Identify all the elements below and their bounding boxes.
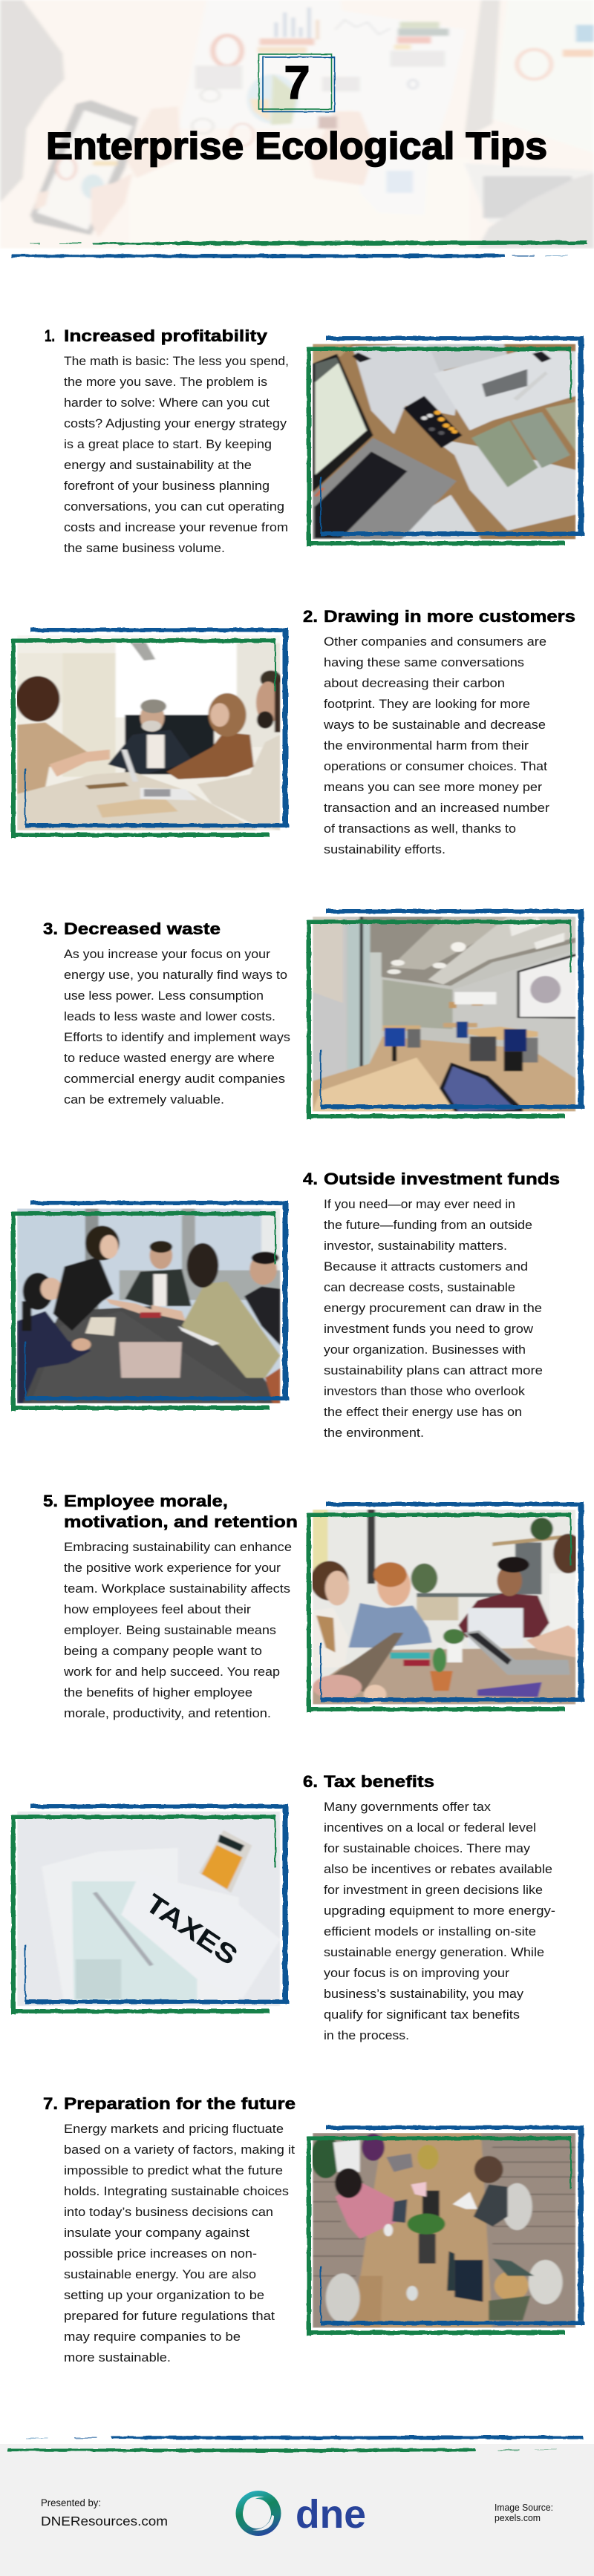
section 2: drawing in more customers [11, 607, 575, 856]
heading 2: 2. [303, 607, 318, 626]
body text 6: in the process. [324, 2028, 409, 2042]
heading 5: motivation, and retention [64, 1513, 298, 1531]
section 7: preparation for the future [43, 2094, 584, 2364]
body text 3: to reduce wasted energy are where [64, 1051, 275, 1065]
heading 1: 1. [45, 327, 55, 345]
body text 3: leads to less waste and lower costs. [64, 1009, 275, 1023]
hero banner: faded photo of charts, phone and laptop [0, 0, 594, 249]
body text 3 [64, 947, 290, 1107]
body text 4: the future—funding from an outside [324, 1218, 532, 1232]
section 5: employee morale [43, 1492, 584, 1720]
body text 7: prepared for future regulations that [64, 2309, 275, 2323]
body text 6: upgrading equipment to more energy- [324, 1904, 555, 1918]
body text 5: being a company people want to [64, 1644, 262, 1658]
body text 2: of transactions as well, thanks to [324, 822, 516, 836]
number badge: 7 [258, 54, 334, 111]
body text 1: energy and sustainability at the [64, 458, 252, 472]
body text 6: Many governments offer tax [324, 1800, 492, 1814]
body text 7: setting up your organization to be [64, 2288, 264, 2302]
body text 7: based on a variety of factors, making it [64, 2143, 295, 2157]
body text 2: the environmental harm from their [324, 738, 529, 753]
body text 1: costs and increase your revenue from [64, 520, 288, 534]
body text 6: efficient models or installing on-site [324, 1924, 536, 1938]
body text 3: Efforts to identify and implement ways [64, 1030, 290, 1044]
TAXES lettering on paper: TAXES [140, 1887, 244, 1971]
presenter credit: Presented by: [41, 2497, 101, 2508]
section 3: decreased waste [43, 909, 584, 1119]
body text 6: your focus is on improving your [324, 1966, 509, 1980]
heading 3: Decreased waste [64, 920, 221, 938]
body text 1: harder to solve: Where can you cut [64, 396, 270, 410]
body text 2 [323, 635, 549, 856]
body text 1: the same business volume. [64, 541, 225, 555]
body text 5: morale, productivity, and retention. [64, 1706, 271, 1720]
body text 4: investment funds you need to grow [324, 1322, 534, 1336]
photo: team around laptops at a wooden table [310, 1510, 584, 1705]
body text 4: energy procurement can draw in the [324, 1301, 542, 1315]
footer band [0, 2444, 594, 2576]
body text 4: If you need—or may ever need in [324, 1197, 515, 1211]
body text 3: As you increase your focus on your [64, 947, 270, 961]
body text 5: team. Workplace sustainability affects [64, 1582, 290, 1596]
body text 7: possible price increases on non- [64, 2246, 257, 2261]
body text 4: the environment. [324, 1426, 424, 1440]
body text 2: Other companies and consumers are [324, 635, 546, 649]
badge number: 7 [284, 57, 310, 109]
body text 1: The math is basic: The less you spend, [64, 354, 289, 368]
section 6: tax benefits [11, 1772, 555, 2042]
brush frame 3 [307, 909, 584, 1119]
hero top line: green brush stroke [30, 240, 587, 245]
body text 5: employer. Being sustainable means [64, 1623, 276, 1637]
brush frame 7 [307, 2126, 584, 2336]
section 1: increased profitability [45, 327, 584, 555]
title: Enterprise Ecological Tips [46, 125, 547, 167]
body text 6 [324, 1800, 555, 2042]
heading 5: 5. [43, 1492, 58, 1510]
section 4: outside investment funds [11, 1170, 560, 1440]
photo: office room with blue chairs [313, 917, 576, 1112]
body text 2: transaction and an increased number [324, 801, 549, 815]
body text 7 [64, 2122, 295, 2364]
heading 6: 6. [303, 1772, 318, 1791]
body text 2: ways to be sustainable and decrease [323, 718, 546, 732]
body text 2: footprint. They are looking for more [324, 697, 530, 711]
body text 1: is a great place to start. By keeping [64, 437, 272, 451]
body text 7: insulate your company against [64, 2226, 249, 2240]
body text 2: sustainability efforts. [324, 842, 446, 856]
photo: laptop, calculator, cash and papers on desk [313, 344, 576, 540]
logo: dne [236, 2491, 366, 2537]
photo shapes [17, 1812, 281, 2006]
body text 4: can decrease costs, sustainable [324, 1280, 515, 1294]
body text 7: Energy markets and pricing fluctuate [64, 2122, 284, 2136]
body text 7: impossible to predict what the future [64, 2163, 283, 2177]
brush frame 1 [307, 336, 584, 546]
body text 1: forefront of your business planning [64, 479, 270, 493]
body text 1: costs? Adjusting your energy strategy [64, 416, 287, 430]
body text 7: more sustainable. [64, 2350, 171, 2364]
heading 4: Outside investment funds [324, 1170, 560, 1188]
presenter credit [41, 2497, 168, 2529]
body text 1 [64, 354, 289, 555]
heading 5: Employee morale, [64, 1492, 228, 1510]
brush frame 5 [307, 1502, 584, 1712]
heading 4: 4. [303, 1170, 318, 1188]
body text 1: conversations, you can cut operating [64, 499, 284, 514]
photo: handshake at a meeting table [16, 635, 281, 830]
body text 7: into today’s business decisions can [64, 2205, 273, 2219]
logo wordmark: dne [296, 2492, 366, 2537]
body text 4: investor, sustainability matters. [324, 1239, 507, 1253]
photo: tax forms, pen and calculator [17, 1812, 281, 2006]
body text 5: the benefits of higher employee [64, 1685, 252, 1700]
footer top line: blue brush stroke [26, 2436, 584, 2440]
photo: five colleagues around a dark table [17, 1208, 281, 1403]
body text 3: use less power. Less consumption [64, 989, 264, 1003]
heading 7: 7. [43, 2094, 58, 2113]
body text 6: incentives on a local or federal level [324, 1820, 536, 1835]
body text 6: also be incentives or rebates available [324, 1862, 552, 1876]
brush frame 4 [11, 1201, 289, 1411]
presenter credit: DNEResources.com [41, 2514, 168, 2529]
heading 2: Drawing in more customers [324, 607, 575, 626]
heading 7: Preparation for the future [64, 2094, 296, 2113]
body text 6: qualify for significant tax benefits [324, 2008, 520, 2022]
hero bottom line: blue brush stroke [11, 254, 568, 258]
heading 6: Tax benefits [324, 1772, 434, 1791]
body text 7: may require companies to be [64, 2330, 241, 2344]
body text 5: how employees feel about their [64, 1602, 251, 1616]
body text 7: sustainable energy. You are also [64, 2267, 256, 2281]
body text 1: the more you save. The problem is [64, 375, 267, 389]
logo ring [236, 2491, 281, 2536]
brush frame 2 [11, 628, 289, 838]
badge frame [258, 54, 334, 111]
body text 6: for sustainable choices. There may [324, 1841, 531, 1855]
body text 2: having these same conversations [324, 655, 524, 669]
body text 4 [324, 1197, 543, 1440]
body text 3: can be extremely valuable. [64, 1092, 224, 1107]
body text 2: about decreasing their carbon [324, 676, 505, 690]
body text 4: investors than those who overlook [324, 1384, 526, 1398]
body text 4: your organization. Businesses with [324, 1343, 526, 1357]
body text 5: Embracing sustainability can enhance [64, 1540, 292, 1554]
image source credit: pexels.com [495, 2513, 541, 2523]
heading 5 [43, 1492, 298, 1531]
body text 6: sustainable energy generation. While [324, 1945, 544, 1959]
body text 6: business’s sustainability, you may [324, 1987, 524, 2001]
body text 4: Because it attracts customers and [324, 1259, 528, 1274]
body text 5: work for and help succeed. You reap [63, 1665, 280, 1679]
image source credit: Image Source: [495, 2503, 553, 2513]
body text 4: the effect their energy use has on [324, 1405, 522, 1419]
body text 5: the positive work experience for your [64, 1561, 281, 1575]
body text 3: commercial energy audit companies [64, 1072, 285, 1086]
heading 1: Increased profitability [64, 327, 268, 345]
body text 4: sustainability plans can attract more [324, 1363, 543, 1377]
brush frame 6 [11, 1804, 289, 2014]
heading 3: 3. [43, 920, 58, 938]
body text 7: holds. Integrating sustainable choices [64, 2184, 289, 2198]
footer bottom line: green brush stroke [7, 2448, 557, 2452]
photo: overhead view of shared wooden desk [310, 2133, 576, 2328]
body text 2: operations or consumer choices. That [324, 759, 547, 773]
body text 6: for investment in green decisions like [324, 1883, 543, 1897]
body text 5 [63, 1540, 292, 1720]
image source credit [495, 2503, 553, 2523]
body text 3: energy use, you naturally find ways to [64, 968, 287, 982]
body text 2: means you can see more money per [324, 780, 542, 794]
